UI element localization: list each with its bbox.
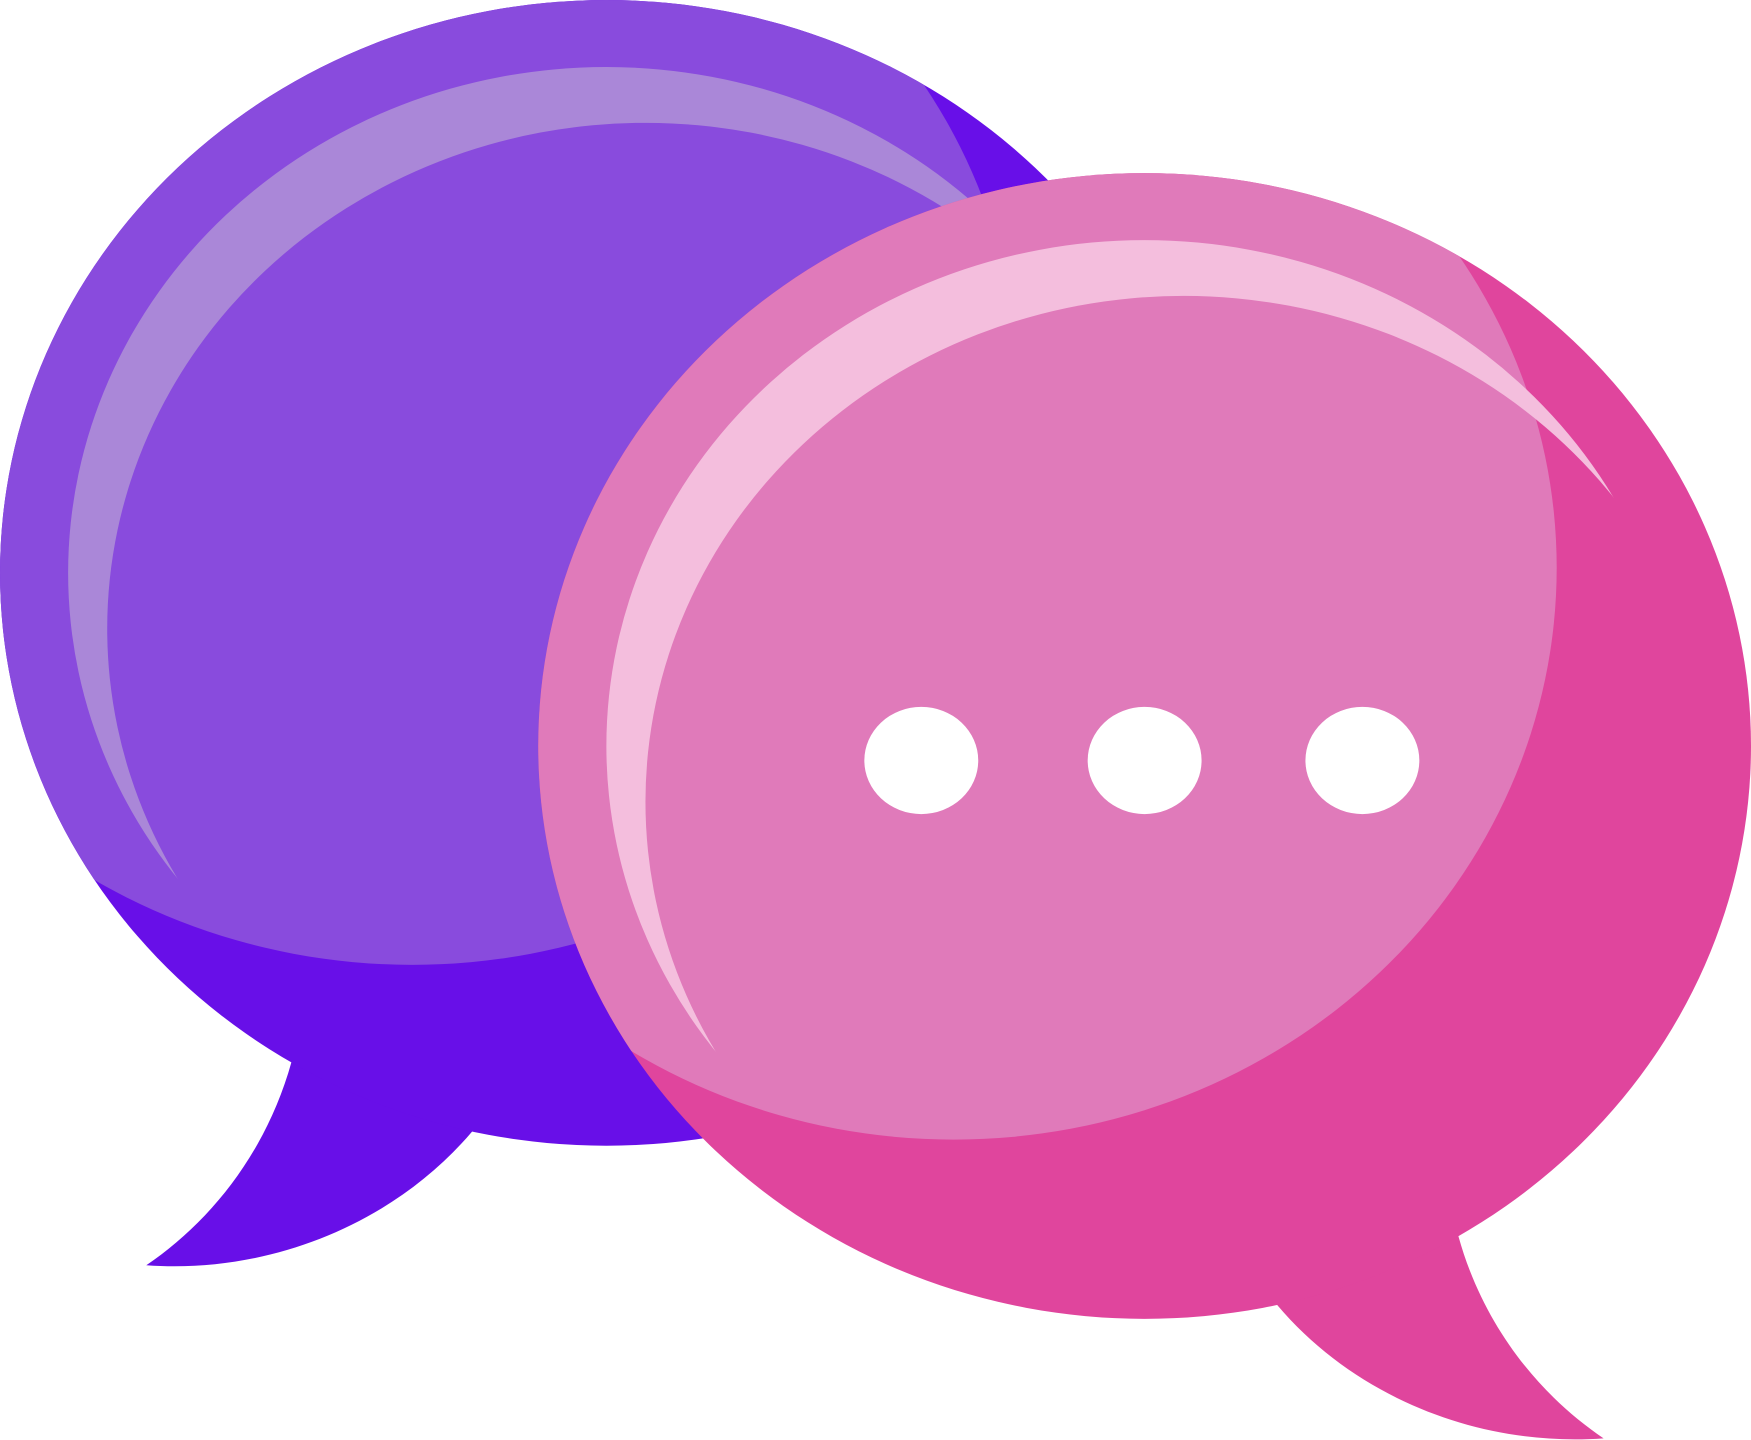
pink bubble highlight xyxy=(606,240,1614,1051)
pink bubble tail xyxy=(1192,1117,1604,1439)
typing dots xyxy=(864,707,1419,814)
purple speech bubble xyxy=(0,0,1048,1266)
purple bubble highlight xyxy=(68,67,968,878)
purple bubble lighter face xyxy=(0,0,1018,965)
purple bubble body xyxy=(0,0,1213,1146)
dot right xyxy=(1305,707,1419,814)
dot left xyxy=(864,707,978,814)
pink bubble body xyxy=(538,173,1751,1319)
dot centre xyxy=(1088,707,1202,814)
pink speech bubble xyxy=(538,173,1751,1440)
purple bubble tail xyxy=(146,949,558,1266)
pink bubble lighter face xyxy=(538,173,1557,1140)
